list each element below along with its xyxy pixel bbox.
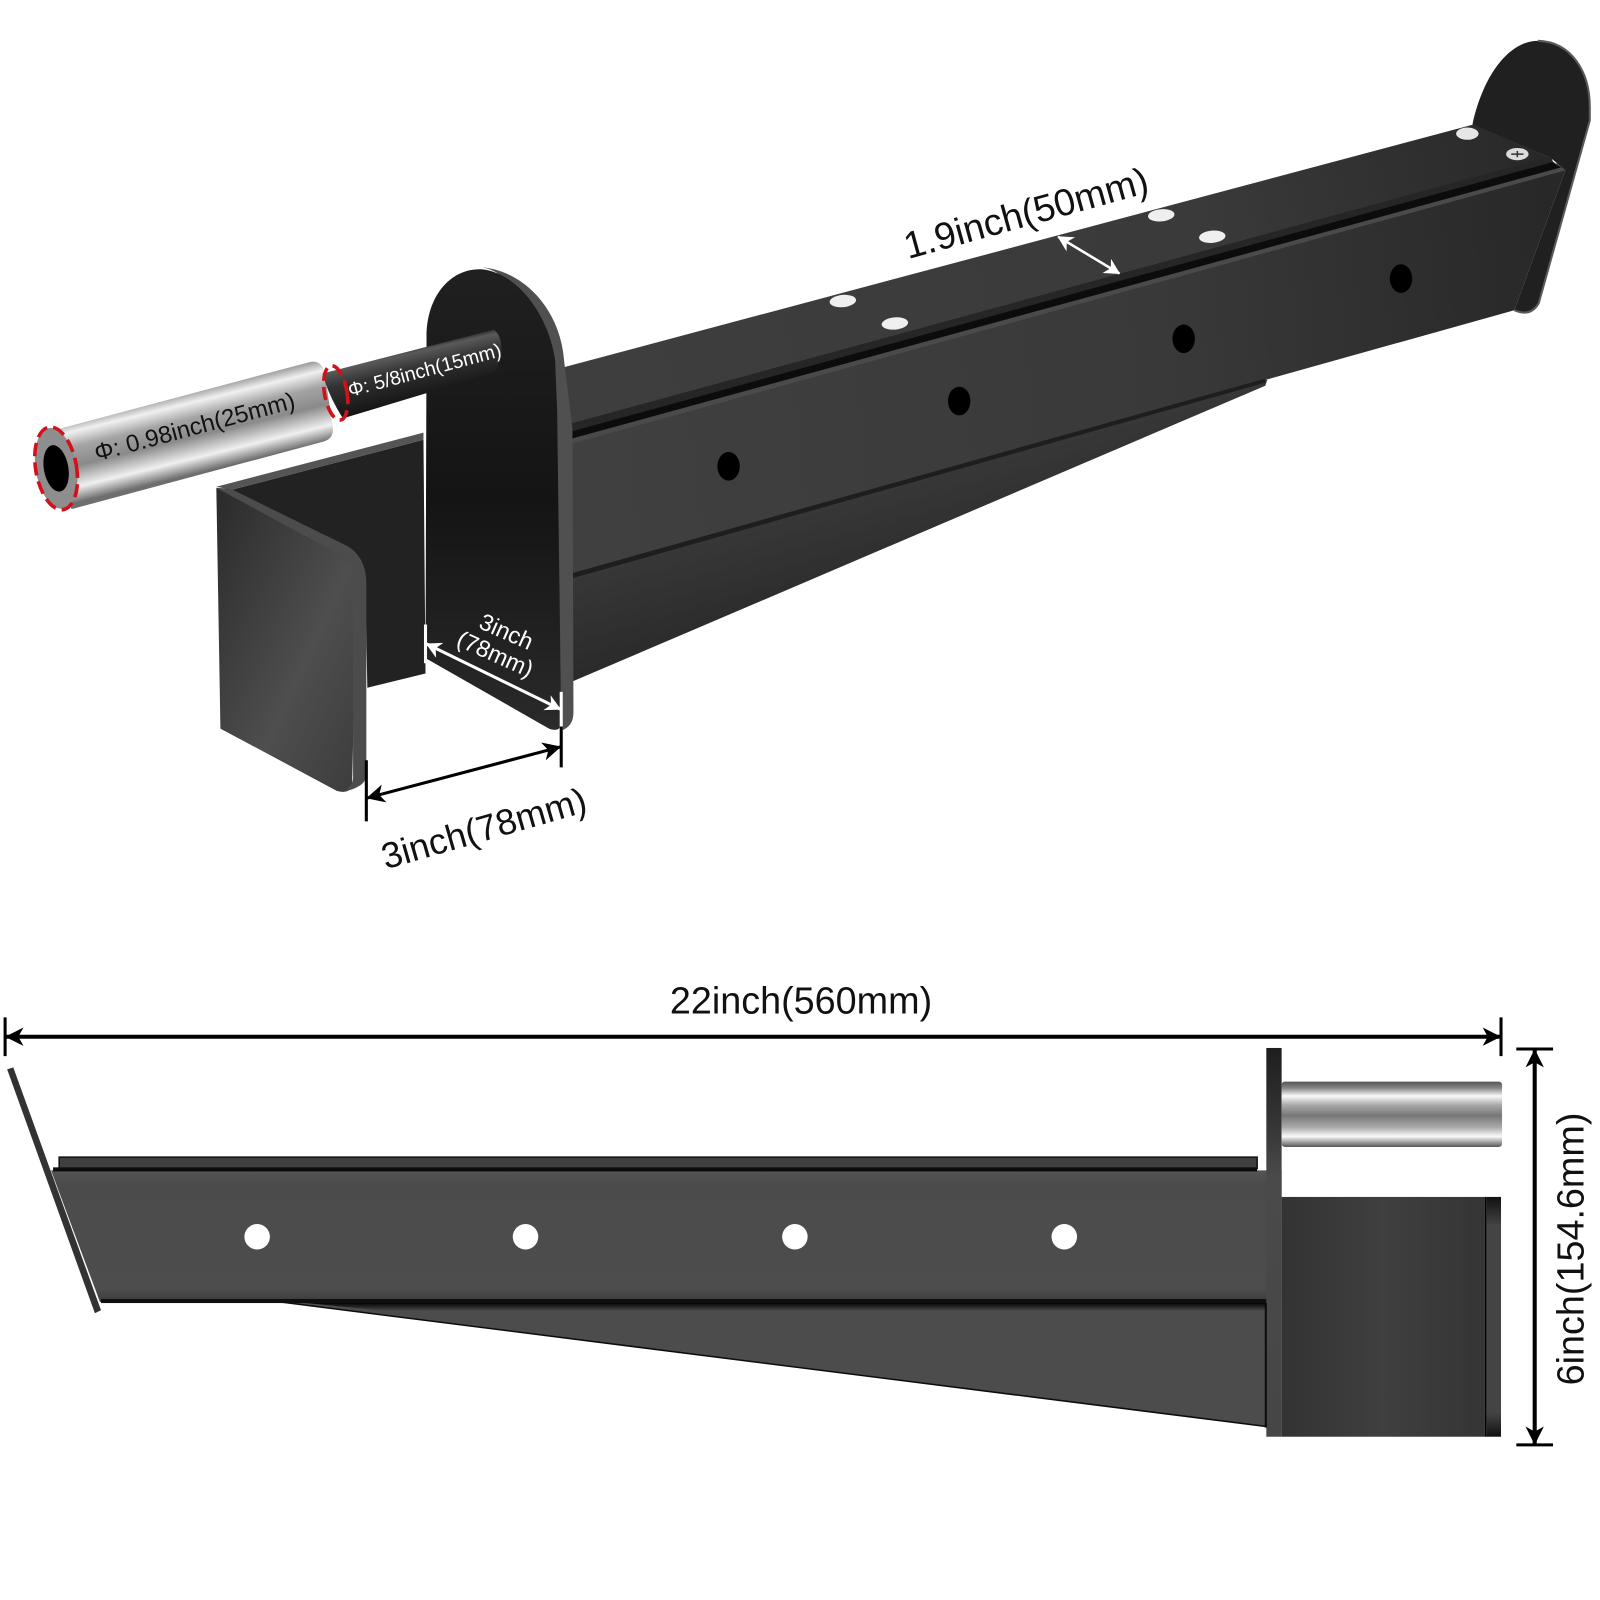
top holes <box>829 208 1226 331</box>
sleeve end face <box>29 425 83 512</box>
arm top plate <box>563 124 1551 427</box>
U-shaped hook <box>216 433 426 792</box>
perspective view of spotter arm <box>29 41 1590 792</box>
hole row <box>244 1224 1077 1249</box>
dimension: total length: 22inch(560mm) <box>670 979 932 1021</box>
vertical front plate <box>1266 1048 1282 1437</box>
red dashed diameter circles <box>29 364 352 513</box>
side highlight <box>567 163 1565 445</box>
gusset shadow <box>306 1303 1265 1311</box>
dimension: arm top width: 1.9inch(50mm) <box>899 159 1153 267</box>
side view of spotter arm <box>7 1048 1502 1437</box>
dimension: height <box>1516 1049 1592 1445</box>
arm gusset <box>567 380 1267 684</box>
top rail <box>59 1157 1257 1168</box>
arm side face <box>567 160 1565 576</box>
gusset ridge line <box>567 379 1265 580</box>
gusset right edge <box>1265 1303 1267 1428</box>
silver sleeve <box>1282 1082 1502 1147</box>
rail shadow <box>53 1167 1257 1171</box>
angled rear plate <box>7 1067 101 1313</box>
body bottom shadow <box>101 1299 1266 1303</box>
gusset <box>281 1302 1266 1427</box>
black rod <box>322 330 501 418</box>
side body <box>51 1170 1282 1302</box>
dimension: hook opening: 3inch(78mm) <box>377 779 591 877</box>
top plate rail <box>567 156 1561 440</box>
side holes <box>717 264 1412 481</box>
front mounting plate <box>426 267 573 731</box>
dimension: plate depth: 3inch <box>476 608 537 655</box>
dimension: total length <box>5 979 1501 1056</box>
dimension: hook opening <box>366 727 591 877</box>
dimension: height: 6inch(154.6mm) <box>1550 1113 1592 1385</box>
label: sleeve diameter: Φ: 0.98inch(25mm) <box>92 387 298 467</box>
silver sleeve <box>29 362 333 512</box>
dimension: plate depth: (78mm) <box>453 626 537 682</box>
rear mounting plate <box>1472 41 1590 313</box>
rear screws <box>1456 128 1529 160</box>
dimension: plate depth <box>426 608 561 731</box>
label: rod diameter: Φ: 5/8inch(15mm) <box>346 340 504 402</box>
hook <box>1282 1197 1501 1437</box>
